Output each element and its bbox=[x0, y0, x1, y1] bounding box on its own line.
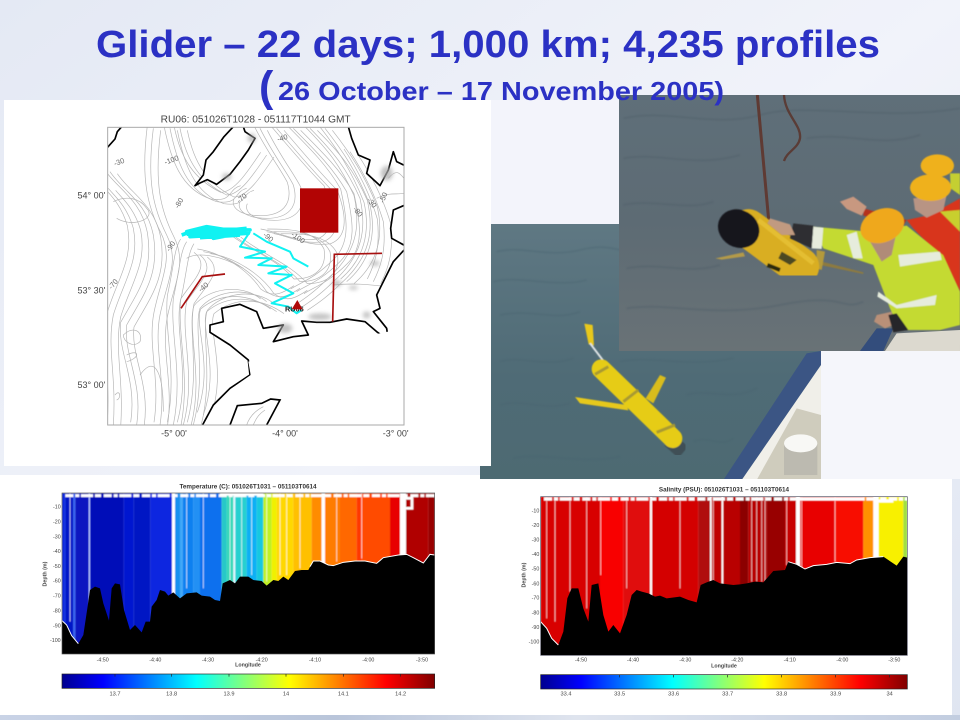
temperature axes labels: -4:10 bbox=[309, 657, 321, 663]
salinity colour bar: 33.6 bbox=[668, 692, 679, 698]
salinity colour bar: 33.7 bbox=[722, 692, 733, 698]
salinity axes labels: Depth (m) bbox=[521, 562, 527, 587]
panel: salinity section bbox=[480, 479, 952, 715]
temperature axes labels: -80 bbox=[53, 608, 61, 614]
salinity axes labels: -20 bbox=[532, 523, 539, 529]
temperature data columns bbox=[62, 493, 435, 656]
shallow grey coastal patches bbox=[222, 134, 393, 333]
cover coastal land below north Wales bbox=[204, 328, 404, 424]
salinity axes labels: -60 bbox=[532, 581, 539, 587]
salinity colour bar: 34 bbox=[887, 692, 893, 698]
contour labels: -100 bbox=[163, 153, 180, 167]
temperature colour bar: 14 bbox=[283, 691, 289, 697]
salinity axes labels: Longitude bbox=[711, 664, 737, 670]
temperature axes labels: -90 bbox=[53, 623, 61, 629]
temperature axes labels: -20 bbox=[53, 520, 61, 526]
salinity axes labels: -70 bbox=[532, 596, 539, 602]
temperature axes labels: -4:50 bbox=[97, 657, 109, 663]
contour labels: -30 bbox=[365, 196, 379, 210]
temperature axes labels: -30 bbox=[53, 534, 61, 540]
title bbox=[96, 24, 880, 111]
salinity plot title: Salinity (PSU): 051026T1031 – 051103T0614 bbox=[659, 487, 790, 494]
contour labels: -90 bbox=[164, 239, 177, 253]
panel: glider track map bbox=[4, 100, 491, 466]
temperature seafloor bbox=[62, 554, 435, 655]
salinity axes labels: -50 bbox=[532, 567, 539, 573]
temperature axes frame bbox=[62, 493, 435, 654]
salinity axes labels bbox=[521, 508, 900, 670]
panel: lower glider photo floating at sea bbox=[480, 100, 821, 480]
panel: temperature section bbox=[0, 475, 480, 715]
temperature axes labels: -10 bbox=[53, 505, 61, 511]
coastlines bbox=[107, 127, 405, 427]
title line one: Glider – 22 days; 1,000 km; 4,235 profiles bbox=[96, 24, 880, 66]
deployment marker RU06 bbox=[285, 300, 304, 313]
salinity colour bar: 33.5 bbox=[614, 692, 625, 698]
salinity colour bar bbox=[541, 675, 907, 698]
salinity axes frame bbox=[541, 497, 907, 655]
salinity axes labels: -10 bbox=[532, 508, 539, 514]
map tick labels bbox=[78, 190, 409, 438]
upper sea waves bbox=[623, 108, 960, 310]
temperature axes labels: -4:20 bbox=[256, 657, 268, 663]
salinity colour bar: 33.9 bbox=[830, 692, 841, 698]
temperature plot title: Temperature (C): 051026T1031 – 051103T0614 bbox=[179, 483, 317, 490]
salinity axes labels: -90 bbox=[532, 625, 539, 631]
title line two: 26 October – 17 November 2005) bbox=[278, 76, 724, 106]
salinity seafloor bbox=[541, 557, 907, 657]
salinity axes labels: -3:50 bbox=[888, 658, 900, 664]
worker with red jacket bbox=[840, 154, 960, 292]
salinity axes labels: -40 bbox=[532, 552, 539, 558]
temperature colour bar: 13.9 bbox=[223, 691, 235, 697]
map tick labels: -3° 00' bbox=[383, 428, 409, 438]
Llyn coast bbox=[230, 399, 280, 425]
floating glider bbox=[575, 324, 683, 452]
title opening bracket: ( bbox=[259, 63, 274, 111]
lifting line and rope bbox=[757, 95, 800, 220]
contour labels: -40 bbox=[196, 280, 210, 294]
deployment marker RU06: RU06 bbox=[285, 304, 304, 313]
red transect lines bbox=[181, 253, 382, 322]
temperature colour bar: 14.2 bbox=[395, 691, 406, 697]
temperature axes labels: -4:40 bbox=[149, 657, 161, 663]
contour labels: -70 bbox=[235, 191, 249, 205]
salinity axes labels: -4:20 bbox=[731, 658, 743, 664]
temperature axes labels: -4:00 bbox=[362, 657, 374, 663]
temperature axes labels: -3:50 bbox=[416, 657, 428, 663]
restricted square area bbox=[300, 188, 338, 233]
temperature axes labels: -40 bbox=[53, 549, 61, 555]
white block lower right of photos bbox=[821, 351, 960, 479]
temperature colour bar: 13.7 bbox=[109, 691, 121, 697]
contour labels bbox=[106, 132, 389, 294]
map tick labels: 53° 00' bbox=[78, 380, 106, 390]
salinity colour bar: 33.4 bbox=[560, 692, 572, 698]
contour labels: -70 bbox=[106, 277, 120, 291]
contour labels: -30 bbox=[113, 156, 126, 168]
salinity axes labels: -4:10 bbox=[784, 658, 796, 664]
temperature axes labels: Depth (m) bbox=[43, 561, 49, 586]
map tick labels: 53° 30' bbox=[78, 285, 106, 295]
temperature axes labels bbox=[43, 505, 428, 669]
glider track bbox=[182, 227, 308, 313]
temperature axes labels: -50 bbox=[53, 564, 61, 570]
sea waves texture bbox=[493, 247, 757, 460]
temperature axes labels: -60 bbox=[53, 579, 61, 585]
map frame bbox=[108, 127, 404, 425]
ship rail and deck bbox=[723, 351, 821, 480]
salinity axes labels: -4:00 bbox=[836, 658, 848, 664]
map tick labels: -5° 00' bbox=[161, 428, 187, 438]
contour labels: -80 bbox=[351, 205, 365, 219]
contour labels: -50 bbox=[377, 191, 389, 204]
temperature axes labels: -70 bbox=[53, 594, 61, 600]
temperature colour bar bbox=[62, 674, 435, 697]
temperature axes labels: -4:30 bbox=[202, 657, 214, 663]
map tick labels: -4° 00' bbox=[272, 428, 298, 438]
salinity axes labels: -4:30 bbox=[679, 658, 691, 664]
salinity data columns bbox=[541, 497, 907, 657]
temperature colour bar: 14.1 bbox=[338, 691, 349, 697]
panel: upper photo of glider being lowered bbox=[619, 95, 960, 351]
suspended glider bbox=[711, 202, 863, 274]
map title: RU06: 051026T1028 - 051117T1044 GMT bbox=[161, 115, 351, 126]
salinity axes labels: -80 bbox=[532, 610, 539, 616]
salinity axes labels: -100 bbox=[529, 639, 539, 645]
contour labels: -80 bbox=[172, 196, 185, 210]
contour labels: -40 bbox=[276, 132, 289, 144]
salinity colour bar: 33.8 bbox=[776, 692, 787, 698]
salinity axes labels: -30 bbox=[532, 538, 539, 544]
salinity axes labels: -4:50 bbox=[575, 658, 587, 664]
boat deck and rail bbox=[860, 328, 960, 351]
bathymetry contours bbox=[102, 126, 404, 427]
temperature axes labels: Longitude bbox=[235, 663, 261, 669]
contour labels: -100 bbox=[290, 230, 307, 246]
temperature axes labels: -100 bbox=[50, 638, 61, 644]
contour labels: -90 bbox=[261, 230, 275, 244]
map tick labels: 54° 00' bbox=[78, 190, 106, 200]
worker in hi-vis jacket bbox=[767, 202, 960, 332]
temperature colour bar: 13.8 bbox=[166, 691, 177, 697]
salinity axes labels: -4:40 bbox=[627, 658, 639, 664]
